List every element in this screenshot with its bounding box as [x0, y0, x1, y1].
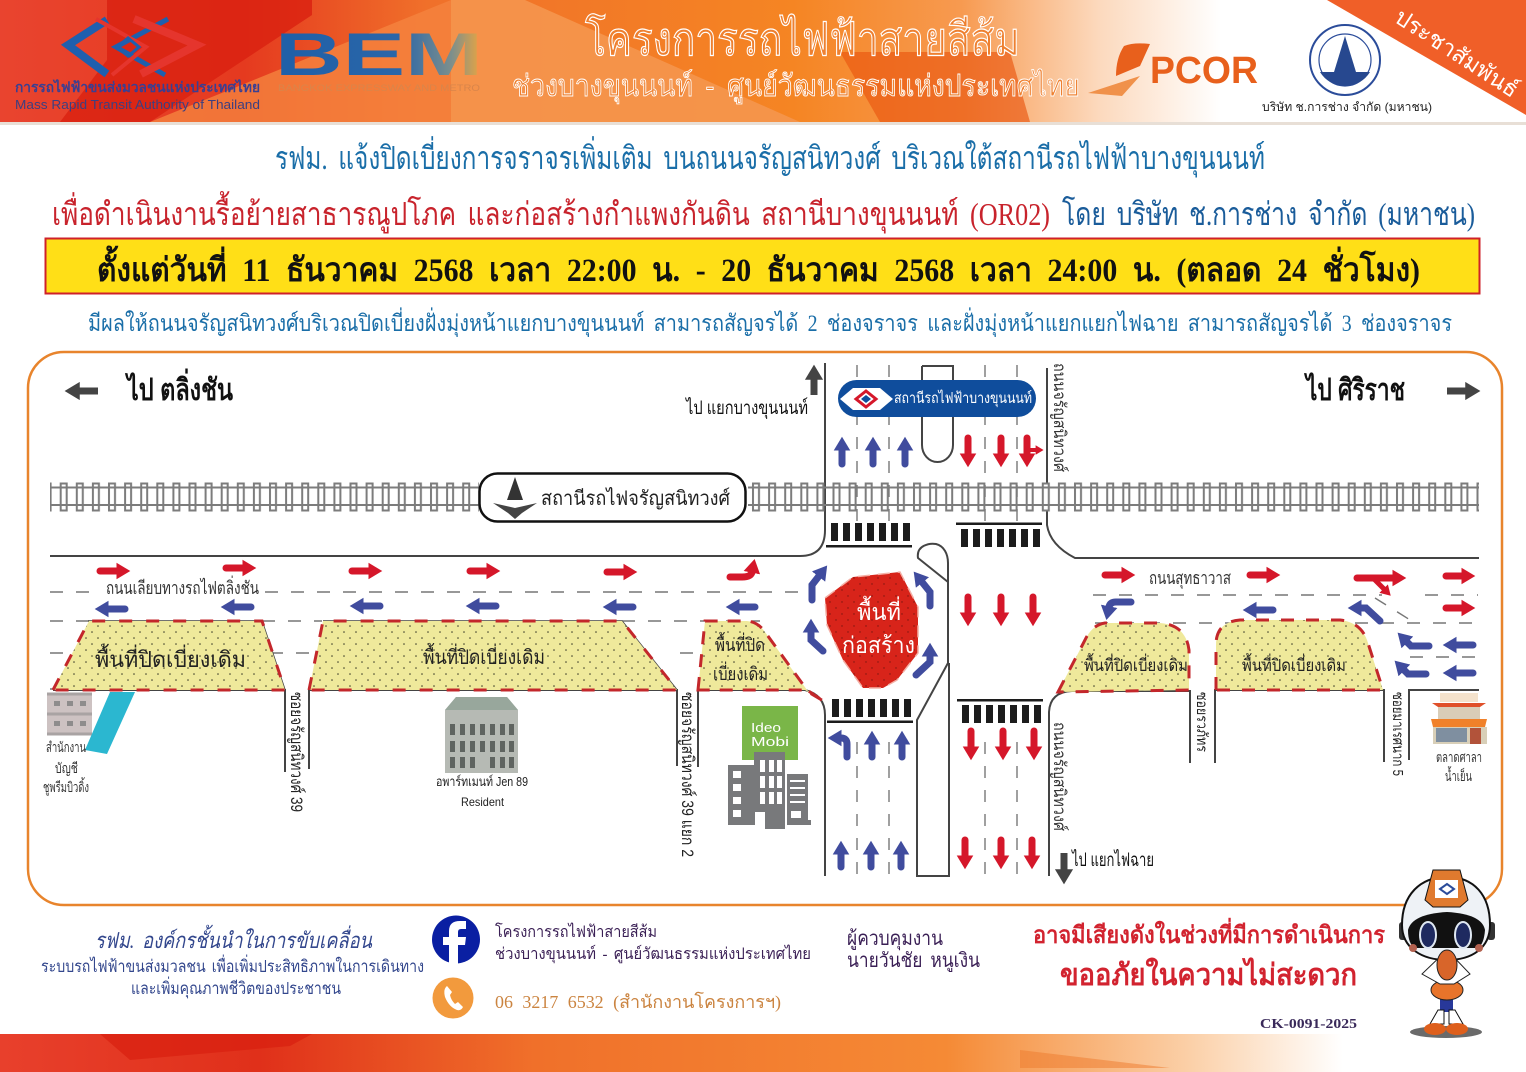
date banner — [46, 238, 1480, 294]
corner ribbon — [1327, 0, 1526, 115]
icon: Ideo Mobi building: Ideo — [751, 720, 781, 735]
site supervisor — [847, 928, 980, 973]
label: apartment name: อพาร์ทเมนท์ Jen 89 — [436, 774, 528, 789]
direction label Bang Khun Non: ไป แยกบางขุนนนท์ — [684, 397, 808, 420]
project contact text: โครงการรถไฟฟ้าสายสีส้ม — [495, 922, 657, 941]
header banner — [0, 0, 1526, 125]
label: Sala Nam Yen market: น้ำเย็น — [1445, 766, 1472, 784]
railway track — [50, 480, 1479, 520]
icon: Ideo Mobi building — [728, 706, 811, 829]
apology: ขออภัยในความไม่สะดวก — [1060, 957, 1357, 992]
corner ribbon: ประชาสัมพันธ์ — [1390, 3, 1524, 103]
existing closure area 3: เบี่ยงเดิม — [713, 661, 768, 684]
existing closure area 2: พื้นที่ปิดเบี่ยงเดิม — [423, 643, 545, 669]
footer slogan: รฟม. องค์กรชั้นนำในการขับเคลื่อน — [95, 924, 373, 953]
lane dashes — [50, 365, 1478, 878]
soi label 39 yaek 2: ซอยจรัญสนิทวงศ์ 39 แยก 2 — [678, 692, 697, 857]
existing closure area 1 — [53, 621, 285, 690]
existing closure area 4: พื้นที่ปิดเบี่ยงเดิม — [1084, 653, 1188, 675]
direction label Siriraj: ไป ศิริราช — [1304, 372, 1405, 407]
MRT station sign — [838, 380, 1036, 417]
PCOR logo: PCOR — [1150, 50, 1258, 92]
footer slogan — [41, 924, 424, 999]
road edges — [50, 363, 1479, 876]
BEM logo — [275, 21, 483, 93]
MRTA logo: การรถไฟฟ้าขนส่งมวลชนแห่งประเทศไทย — [15, 78, 260, 95]
icon: office building — [47, 692, 135, 754]
label: accounting office: ชูพรีมบิวดิ้ง — [43, 777, 89, 796]
road name along the railway: ถนนเลียบทางรถไฟตลิ่งชัน — [106, 575, 259, 598]
footer slogan: และเพิ่มคุณภาพชีวิตของประชาชน — [131, 976, 341, 999]
document code: CK-0091-2025 — [1260, 1017, 1357, 1032]
footer bar — [0, 1034, 1526, 1072]
CH. Karnchang logo — [1262, 25, 1432, 114]
construction area: พื้นที่ — [857, 596, 901, 625]
soi label 39: ซอยจรัญสนิทวงศ์ 39 — [287, 692, 306, 812]
BEM logo: BANGKOK EXPRESSWAY AND METRO — [278, 83, 480, 93]
site supervisor: นายวันชัย หนูเงิน — [847, 950, 980, 973]
existing closure area 5 — [1216, 620, 1383, 690]
footer slogan: ระบบรถไฟฟ้าขนส่งมวลชน เพื่อเพิ่มประสิทธิภาพในการเดินทาง — [41, 954, 424, 976]
BEM logo: BEM — [275, 21, 483, 88]
red traffic arrows — [100, 438, 1462, 856]
icon: phone — [432, 978, 474, 1018]
date banner: ตั้งแต่วันที่ 11 ธันวาคม 2568 เวลา 22:00 น. - 20 ธันวาคม 2568 เวลา 24:00 น. (ตลอด 24 ชั่วโมง) — [97, 245, 1420, 289]
MRT station sign: สถานีรถไฟฟ้าบางขุนนนท์ — [894, 389, 1032, 408]
existing closure area 1: พื้นที่ปิดเบี่ยงเดิม — [95, 644, 246, 672]
icon: market shop — [1431, 693, 1487, 744]
noise notice: อาจมีเสียงดังในช่วงที่มีการดำเนินการ — [1033, 917, 1385, 949]
mascot — [1399, 870, 1495, 1038]
label: apartment name — [436, 774, 528, 809]
road name Charan top: ถนนจรัญสนิทวงศ์ — [1050, 363, 1069, 472]
existing closure area 3: พื้นที่ปิด — [715, 632, 765, 655]
CH. Karnchang logo: บริษัท ช.การช่าง จำกัด (มหาชน) — [1262, 100, 1432, 114]
phone number: 06 3217 6532 (สำนักงานโครงการฯ) — [495, 991, 781, 1013]
label: accounting office — [43, 739, 89, 796]
label: accounting office: สำนักงาน — [46, 739, 86, 755]
MRTA logo — [15, 19, 260, 112]
direction label Taling Chan: ไป ตลิ่งชัน — [125, 368, 233, 407]
construction area: ก่อสร้าง — [842, 632, 915, 658]
project contact text: ช่วงบางขุนนนท์ - ศูนย์วัฒนธรรมแห่งประเทศไทย — [495, 944, 811, 964]
project contact text — [495, 922, 811, 964]
existing closure area 4 — [1058, 623, 1189, 692]
icon: facebook — [432, 916, 480, 964]
label: Sala Nam Yen market — [1436, 749, 1482, 784]
label: accounting office: บัญชี — [55, 760, 78, 776]
PCOR logo — [1088, 43, 1258, 96]
blue traffic arrows — [108, 450, 1473, 867]
soi label 5: ซอยมาเรศนาก 5 — [1389, 692, 1406, 776]
existing closure area 3 — [698, 621, 825, 702]
project subtitle: ช่วงบางขุนนนท์ - ศูนย์วัฒนธรรมแห่งประเทศไทย — [512, 68, 1080, 105]
railway station sign: สถานีรถไฟจรัญสนิทวงศ์ — [541, 487, 730, 510]
project title: โครงการรถไฟฟ้าสายสีส้ม — [585, 13, 1020, 65]
headline line 2 red: เพื่อดำเนินงานรื้อย้ายสาธารณูปโภค และก่อสร้างกำแพงกันดิน สถานีบางขุนนนท์ (OR02) — [52, 191, 1050, 234]
road name Suthawat: ถนนสุทธาวาส — [1149, 568, 1231, 589]
label: apartment name: Resident — [461, 795, 505, 809]
panel: traffic map — [28, 352, 1502, 905]
direction arrows dark — [79, 379, 1466, 870]
existing closure area 2 — [309, 621, 677, 690]
railway station sign — [480, 474, 746, 522]
crosswalks — [826, 522, 1043, 723]
direction label Fai Chai: ไป แยกไฟฉาย — [1071, 849, 1154, 871]
construction area — [825, 572, 918, 688]
road name Charan bottom: ถนนจรัญสนิทวงศ์ — [1050, 722, 1069, 831]
MRTA logo: Mass Rapid Transit Authority of Thailand — [15, 97, 260, 112]
label: Sala Nam Yen market: ตลาดศาลา — [1436, 749, 1482, 765]
icon: apartment — [445, 697, 518, 773]
existing closure area 5: พื้นที่ปิดเบี่ยงเดิม — [1242, 653, 1346, 675]
site supervisor: ผู้ควบคุมงาน — [847, 928, 943, 951]
icon: Ideo Mobi building: Mobi — [751, 734, 789, 749]
soi label: ซอยรวภัทร — [1193, 692, 1210, 752]
